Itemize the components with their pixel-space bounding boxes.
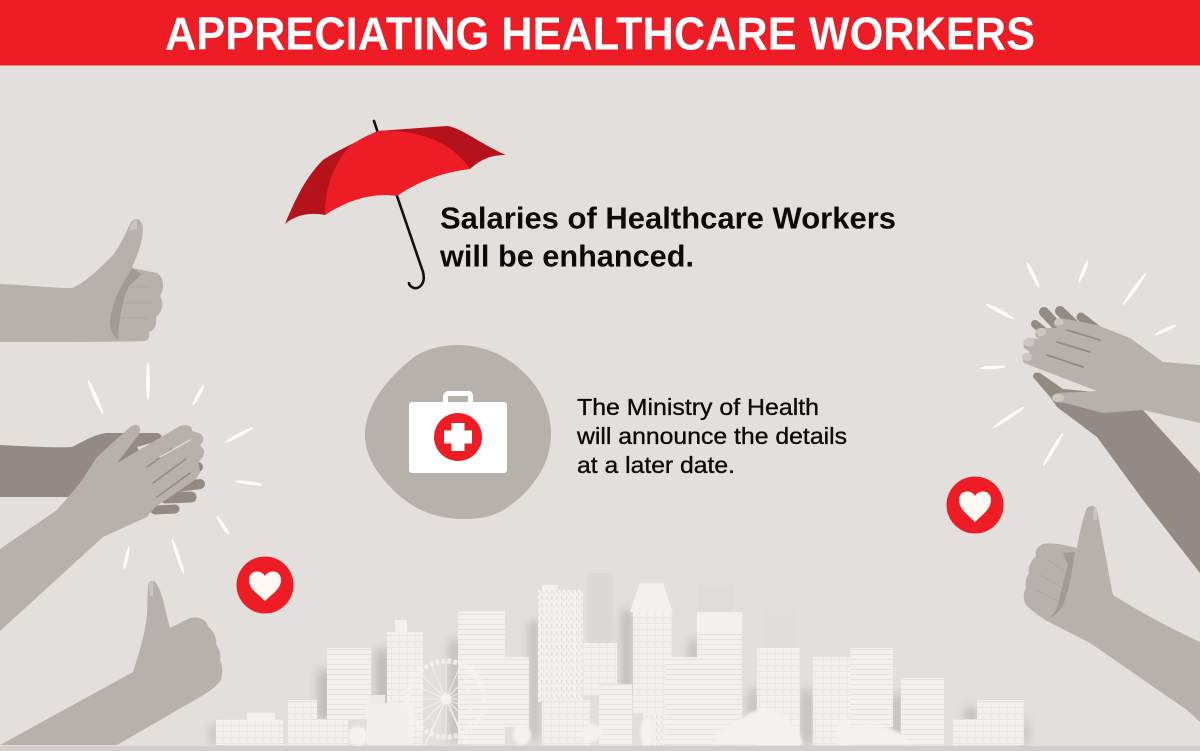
title banner: APPRECIATING HEALTHCARE WORKERS bbox=[165, 8, 1035, 60]
icon: clapping hands, right bbox=[1022, 311, 1200, 573]
text: ministry details: The Ministry of Health bbox=[577, 394, 819, 420]
finger gaps bbox=[1047, 330, 1100, 367]
umbrella icon bbox=[285, 121, 506, 288]
sparks, left bbox=[86, 362, 263, 575]
icon: thumbs up, upper left bbox=[0, 219, 163, 342]
city skyline bbox=[0, 573, 1200, 751]
front hand bbox=[1023, 318, 1200, 423]
back hand bbox=[0, 433, 200, 510]
icon: heart badge, right bbox=[946, 476, 1004, 534]
sparks, right bbox=[979, 260, 1177, 467]
icon: thumbs up, lower left bbox=[0, 581, 222, 745]
icon: medical kit bbox=[365, 345, 551, 519]
text: ministry details: at a later date. bbox=[577, 452, 735, 478]
buildings bbox=[216, 583, 1024, 745]
trees and shrubs bbox=[348, 710, 913, 746]
ferris wheel bbox=[408, 661, 484, 745]
icon: thumbs up, lower right bbox=[1024, 506, 1200, 722]
front hand bbox=[0, 425, 204, 631]
ground bbox=[0, 746, 1200, 751]
heading: salaries: Salaries of Healthcare Workers bbox=[440, 200, 896, 236]
heading: salaries: will be enhanced. bbox=[439, 238, 694, 274]
icon: heart badge, left bbox=[236, 556, 294, 614]
text: ministry details: will announce the details bbox=[576, 423, 847, 449]
building shadows bbox=[211, 610, 1028, 745]
finger gaps bbox=[147, 440, 190, 497]
title banner bbox=[0, 0, 1200, 66]
fingernails bbox=[1022, 318, 1064, 402]
faded background buildings bbox=[587, 573, 795, 648]
fist shading bbox=[110, 268, 142, 340]
back hand bbox=[1033, 311, 1200, 573]
icon: clapping hands, left bbox=[0, 425, 204, 631]
